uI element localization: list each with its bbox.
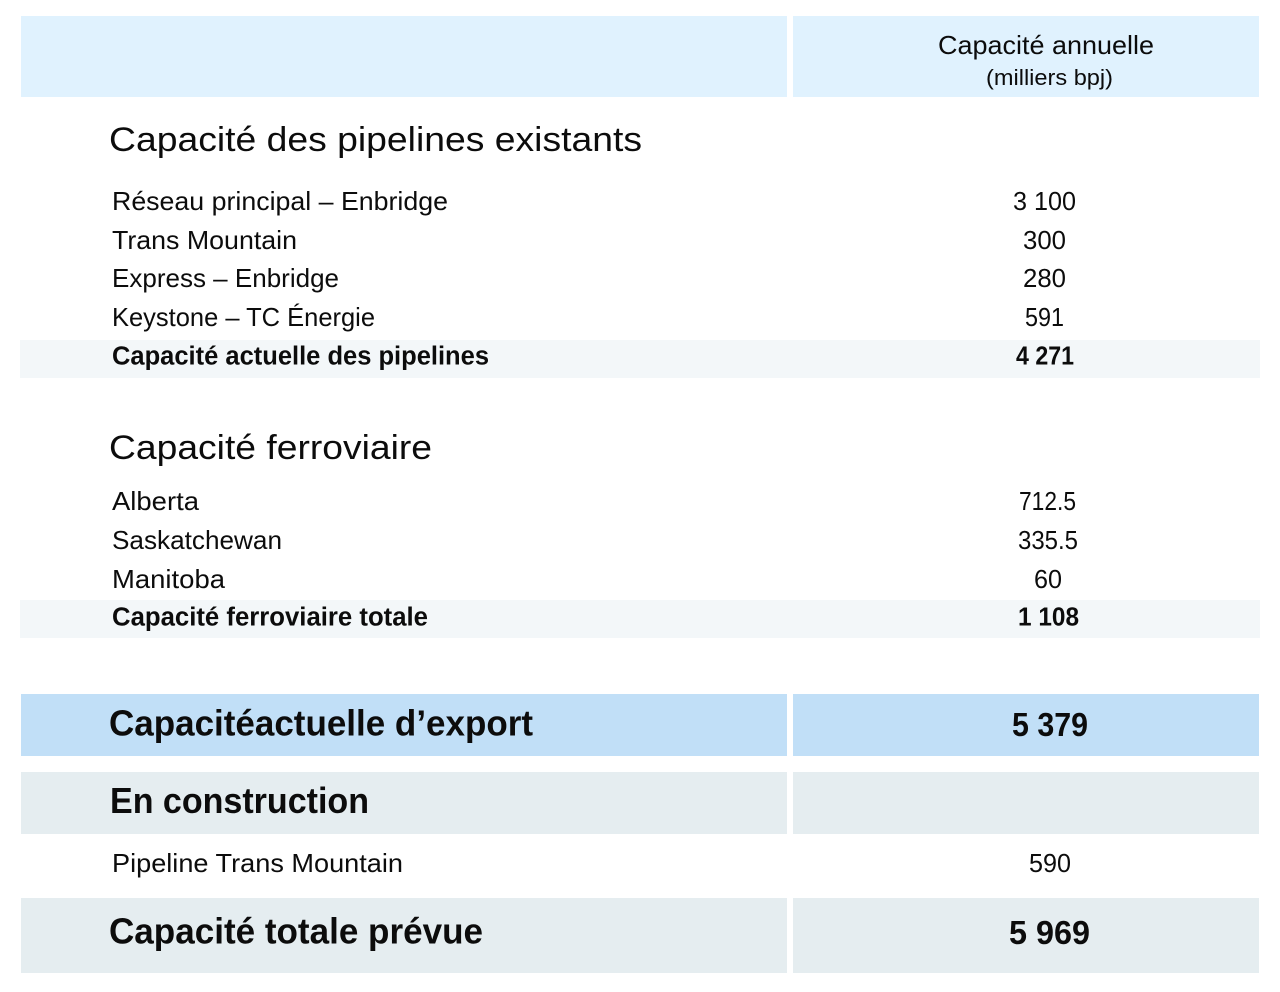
total: current export capacity: 5 379: [1012, 706, 1088, 743]
header row: (milliers bpj): [986, 65, 1113, 90]
rail rows: Alberta: [112, 486, 200, 516]
pipeline rows: 591: [1025, 302, 1064, 332]
heading: existing pipelines: Capacité des pipelines existants: [109, 121, 642, 159]
rail rows: 60: [1034, 564, 1062, 594]
total: current export capacity: [21, 694, 1259, 756]
pipeline rows: Keystone – TC Énergie: [112, 302, 375, 332]
rail rows: 712.5: [1019, 486, 1076, 516]
subtotal: rail: 1 108: [1018, 604, 1079, 632]
rail rows: Saskatchewan: [112, 525, 282, 555]
header row: Capacité annuelle: [938, 30, 1154, 60]
header row: [21, 16, 1259, 97]
total: planned capacity: [21, 898, 1259, 973]
pipeline rows: 300: [1023, 225, 1066, 255]
pipeline rows: 3 100: [1013, 186, 1076, 216]
subtotal: rail: [20, 600, 1260, 638]
pipeline rows: 280: [1023, 263, 1066, 293]
total: planned capacity: Capacité totale prévue: [109, 910, 483, 952]
subtotal: pipelines: 4 271: [1016, 342, 1074, 370]
pipeline rows: [112, 186, 1076, 332]
rail rows: [112, 486, 1078, 594]
total: planned capacity: 5 969: [1009, 914, 1090, 951]
heading: under construction: [21, 772, 1259, 834]
row: Trans Mountain pipeline: 590: [1029, 848, 1071, 878]
heading: under construction: En construction: [110, 780, 369, 821]
pipeline rows: Express – Enbridge: [112, 263, 339, 293]
heading: rail capacity: Capacité ferroviaire: [109, 429, 432, 467]
pipeline rows: Trans Mountain: [112, 225, 297, 255]
subtotal: rail: Capacité ferroviaire totale: [112, 604, 428, 632]
pipeline rows: Réseau principal – Enbridge: [112, 186, 448, 216]
row: Trans Mountain pipeline: Pipeline Trans Mountain: [112, 848, 403, 878]
rail rows: Manitoba: [112, 564, 226, 594]
total: current export capacity: Capacitéactuelle d’export: [109, 702, 533, 744]
subtotal: pipelines: [20, 340, 1260, 378]
rail rows: 335.5: [1018, 525, 1078, 555]
row: Trans Mountain pipeline: [112, 848, 1071, 878]
subtotal: pipelines: Capacité actuelle des pipelines: [112, 342, 489, 370]
